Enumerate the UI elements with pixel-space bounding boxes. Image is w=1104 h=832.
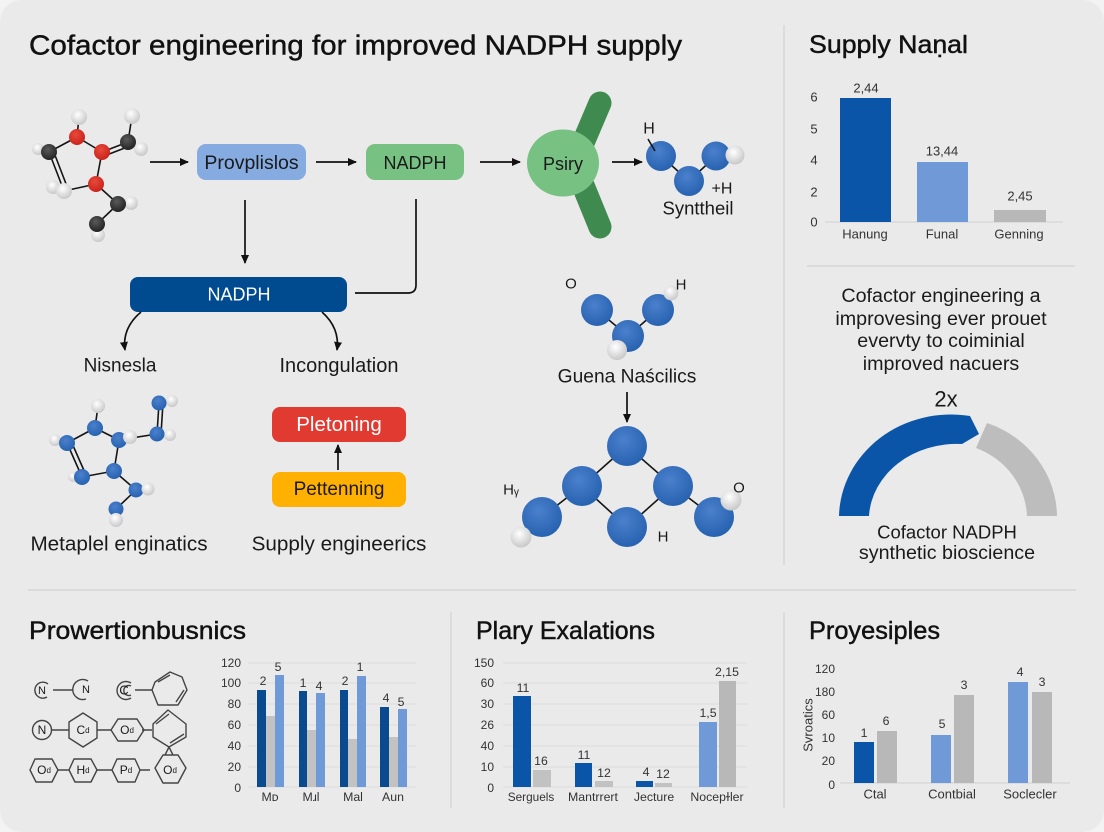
bar chart: four groups: [221, 656, 416, 804]
bar chart: paired bars: 4: [643, 765, 650, 779]
bar chart: three groups: 180: [815, 685, 835, 699]
diagram: chemical structure: Od: [120, 723, 134, 737]
bar chart: four groups: 100: [221, 676, 241, 690]
bar chart: three groups: 3: [1039, 675, 1046, 689]
panel: Proyesiples: [800, 617, 1070, 802]
arrow: to Nisnesla: [125, 312, 141, 350]
bar chart: four groups: 2: [260, 674, 267, 688]
diagram: chemical structure: N: [82, 684, 90, 696]
bar chart: three groups: 3: [961, 678, 968, 692]
label: Supply engineerics: Supply engineerics: [252, 532, 426, 556]
bar chart: four groups: 40: [228, 739, 241, 753]
panel: Prowertionbusnics: [29, 617, 416, 804]
label: Synthel: Synttheil: [663, 198, 733, 218]
connector: NADPH to bar: [355, 199, 416, 293]
text block: summary: evervty to coiminial: [857, 330, 1025, 352]
bar chart: supply: Hanung: [842, 226, 888, 242]
diagram: chemical structure: [30, 672, 187, 783]
bar chart: four groups: 0: [234, 781, 241, 795]
bar chart: four groups: 1: [357, 660, 364, 674]
bar chart: four groups: 60: [228, 718, 241, 732]
panel: summary and gauge: [835, 285, 1057, 564]
icon: Psiry enzyme: [527, 103, 600, 227]
icon: red and black molecule: [32, 108, 148, 242]
label: Incongulation: Incongulation: [280, 355, 398, 377]
bar chart: four groups: Mᴅ: [261, 790, 279, 804]
bar chart: three groups: 6: [883, 714, 890, 728]
bar chart: three groups: 0: [828, 778, 835, 792]
bar chart: paired bars: 16: [534, 754, 548, 768]
heading: Supply Nadal: Supply Naṇal: [809, 31, 968, 59]
text block: summary: improvesing ever prouet: [835, 308, 1047, 330]
bar chart: paired bars: 60: [481, 676, 494, 690]
bar chart: supply: 0: [810, 214, 818, 230]
arrow: down to ring molecule: [626, 392, 628, 422]
bar chart: four groups: Aun: [382, 790, 404, 804]
label: Metaplel enginatics: Metaplel enginatics: [30, 532, 208, 556]
title: Cofactor engineering for improved NADPH supply: [29, 30, 682, 60]
bar chart: paired bars: Serguels: [508, 790, 554, 804]
box: NADPH dark: [130, 277, 347, 312]
arrow: to Psiry: [480, 161, 520, 163]
diagram: chemical structure: Hd: [76, 763, 90, 777]
diagram: chemical structure: Pd: [120, 763, 132, 777]
bar chart: three groups: 1: [861, 726, 868, 740]
box: Pletoning: Pletoning: [296, 413, 382, 436]
diagram: chemical structure: Cd: [76, 723, 90, 737]
panel: supply chart: [809, 31, 1063, 242]
box: Pettenning: [272, 472, 406, 507]
arrow: up to Pletoning: [337, 445, 339, 470]
gauge: [839, 414, 1057, 516]
bar chart: three groups: [800, 662, 1070, 802]
bar chart: paired bars: 2,15: [715, 665, 739, 679]
diagram: chemical structure: Od: [163, 763, 177, 777]
bar chart: supply: 2,44: [853, 80, 879, 96]
bar chart: three groups: 4: [1017, 665, 1024, 679]
text block: summary: Cofactor engineering a: [841, 285, 1041, 307]
bar chart: three groups: Ctal: [863, 786, 887, 802]
bar chart: four groups: 4: [383, 691, 390, 705]
bar chart: paired bars: 1,5: [699, 706, 717, 720]
diagram: chemical structure: C: [119, 682, 129, 698]
icon: blue molecule top: H: [676, 276, 686, 294]
panel: Plary Exalations: [474, 617, 747, 804]
bar chart: paired bars: 12: [656, 767, 670, 781]
bar chart: supply: 5: [810, 122, 818, 136]
bar chart: paired bars: Mantrrert: [568, 790, 619, 804]
bar chart: four groups: 1: [300, 676, 307, 690]
heading: Proyesiples: [809, 617, 940, 645]
icon: Psiry enzyme: Psiry: [543, 154, 583, 174]
bar chart: paired bars: 10: [481, 760, 494, 774]
bar chart: paired bars: [474, 656, 747, 804]
bar chart: three groups: Soclecler: [1003, 786, 1057, 802]
icon: blue ring molecule: [503, 426, 745, 548]
diagram: chemical structure: N: [38, 685, 46, 697]
text block: gauge caption: Cofactor NADPH: [877, 522, 1017, 542]
bar chart: supply: Funal: [926, 226, 958, 242]
text block: summary: [835, 285, 1047, 375]
bar chart: four groups: 2: [342, 674, 349, 688]
bar chart: paired bars: Jecture: [634, 790, 674, 804]
box: Proteins: [197, 144, 306, 180]
arrow: to synthesis molecule: [612, 161, 642, 163]
bar chart: three groups: 120: [815, 662, 835, 676]
bar chart: supply: 6: [810, 90, 818, 104]
bar chart: three groups: Svroatics: [800, 698, 816, 752]
icon: synthesis molecule: +H: [712, 180, 732, 198]
text block: gauge caption: [859, 522, 1035, 564]
box: Proteins: Provplislos: [204, 152, 299, 174]
bar chart: supply: 2,45: [1007, 188, 1033, 204]
icon: blue molecule top: O: [565, 276, 577, 292]
bar chart: paired bars: 11: [517, 681, 530, 695]
bar chart: paired bars: 30: [481, 697, 494, 711]
bar chart: supply: Genning: [994, 226, 1044, 242]
icon: synthesis molecule: [643, 120, 744, 198]
bar chart: four groups: 5: [275, 660, 282, 674]
bar chart: paired bars: 26: [481, 718, 494, 732]
bar chart: paired bars: 40: [481, 739, 494, 753]
diagram: chemical structure: N: [38, 723, 46, 737]
bar chart: paired bars: Nocepɫler: [690, 790, 744, 804]
bar chart: four groups: 4: [316, 679, 323, 693]
diagram: chemical structure: Od: [37, 763, 51, 777]
label: Guena Nascilics: Guena Naścilics: [558, 366, 696, 388]
text block: gauge caption: synthetic bioscience: [859, 542, 1035, 564]
bar chart: three groups: 20: [822, 754, 835, 768]
bar chart: four groups: 80: [228, 697, 241, 711]
bar chart: supply: [810, 80, 1063, 242]
heading: Prowertionbusnics: [29, 617, 246, 645]
value: 2x: 2x: [934, 386, 958, 412]
bar chart: supply: 2: [810, 184, 818, 200]
bar chart: four groups: 20: [228, 760, 241, 774]
icon: blue ring molecule: H: [658, 528, 668, 546]
bar chart: paired bars: 0: [487, 781, 494, 795]
icon: blue ring molecule: Hᵧ: [503, 482, 519, 498]
bar chart: three groups: 10: [822, 731, 835, 745]
bar chart: four groups: 5: [398, 695, 405, 709]
box: NADPH dark: NADPH: [207, 284, 271, 304]
bar chart: three groups: 60: [822, 708, 835, 722]
bar chart: four groups: Mɹl: [302, 790, 320, 804]
box: Pettenning: Pettenning: [294, 479, 384, 500]
icon: blue ring molecule: O: [733, 480, 745, 496]
bar chart: four groups: 120: [221, 656, 241, 670]
arrow: Propl to NADPH: [316, 161, 356, 163]
heading: Plary Exalations: [476, 617, 655, 645]
text block: summary: improved nacuers: [863, 353, 1019, 375]
arrow: to Incongulation: [322, 312, 337, 350]
bar chart: paired bars: 150: [474, 656, 494, 670]
bar chart: supply: 4: [810, 152, 818, 168]
box: NADPH green: NADPH: [383, 153, 447, 173]
box: NADPH green: [366, 144, 464, 180]
bar chart: paired bars: 12: [597, 766, 611, 780]
icon: blue branched molecule: [49, 395, 178, 527]
panel: pathway diagram: [30, 103, 745, 556]
arrow: down to NADPH bar: [244, 200, 246, 263]
bar chart: three groups: Contbial: [928, 786, 976, 802]
bar chart: supply: 13,44: [926, 144, 958, 158]
icon: synthesis molecule: H: [643, 120, 655, 138]
box: Pletoning: [272, 407, 406, 442]
icon: blue molecule top: [565, 276, 686, 360]
label: Nisnesla: Nisnesla: [84, 356, 157, 376]
bar chart: four groups: Mal: [343, 790, 363, 804]
arrow: molecule to Propl: [150, 161, 188, 163]
bar chart: three groups: 5: [939, 717, 946, 731]
bar chart: paired bars: 11: [578, 748, 591, 762]
